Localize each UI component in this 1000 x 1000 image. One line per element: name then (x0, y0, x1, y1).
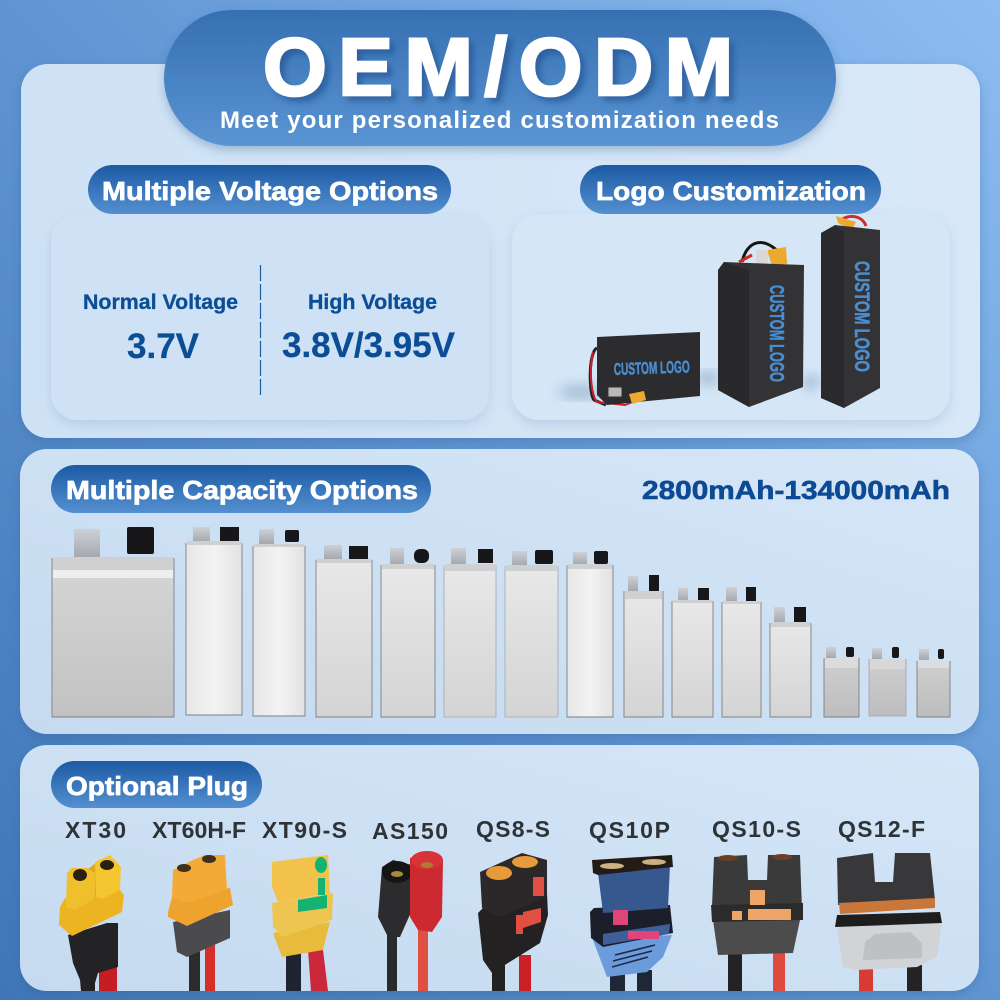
pouch cell 8 (567, 551, 613, 717)
label: AS150: AS150 (372, 818, 448, 844)
pouch cell 7 (505, 550, 558, 717)
logo text: CUSTOM LOGO (613, 357, 690, 379)
connector: XT30 (59, 855, 124, 991)
heading: capacity (51, 465, 431, 513)
label: XT90-S: XT90-S (262, 817, 347, 843)
pouch cell 10 (672, 588, 713, 717)
connector: XT90-S (272, 855, 333, 991)
pouch cell 9 (624, 575, 663, 717)
label: QS12-F: QS12-F (838, 816, 925, 842)
title: OEM/ODM (263, 22, 733, 113)
pouch cell 15 (917, 649, 950, 717)
connector: AS150 (378, 851, 443, 991)
connector: QS10-S (711, 854, 803, 991)
connector: QS10P (590, 855, 673, 991)
connector: QS8-S (478, 853, 548, 991)
heading: voltage: Multiple Voltage Options (102, 176, 438, 206)
high voltage value: 3.8V/3.95V (282, 326, 456, 365)
normal voltage label: Normal Voltage (83, 291, 238, 314)
floor shadows (558, 371, 821, 399)
normal voltage value: 3.7V (127, 327, 200, 366)
pouch cell 4 (316, 545, 372, 717)
voltage divider (260, 265, 262, 397)
pouch cell 5 (381, 548, 435, 717)
label: XT60H-F: XT60H-F (152, 817, 246, 843)
battery: tall pack (821, 216, 880, 408)
label: QS10P: QS10P (589, 817, 670, 843)
pouch cell 3 (253, 529, 305, 716)
connectors (59, 851, 942, 991)
label: XT30: XT30 (65, 817, 126, 843)
heading: plug: Optional Plug (66, 771, 248, 801)
panel: logo card (512, 214, 950, 420)
pouch cell 2 (186, 527, 242, 715)
connector: QS12-F (835, 853, 942, 991)
battery: medium pack (718, 242, 804, 407)
heading: capacity: Multiple Capacity Options (66, 475, 418, 505)
pouch cell 11 (722, 587, 761, 717)
panel: optional plug (20, 745, 979, 991)
heading: voltage (88, 165, 451, 214)
header banner (164, 10, 836, 146)
heading: logo (580, 165, 881, 214)
high voltage label: High Voltage (308, 291, 437, 314)
panel: capacity options (20, 449, 979, 734)
panel: customization options (21, 64, 980, 438)
label: QS10-S: QS10-S (712, 816, 801, 842)
logo text: CUSTOM LOGO (850, 261, 873, 372)
pouch cell 12 (770, 607, 811, 717)
heading: plug (51, 761, 262, 808)
pouch cell 1 (52, 527, 174, 717)
panel: voltage card (51, 214, 489, 420)
pouch cell 6 (444, 548, 496, 717)
pouch cell 13 (824, 647, 859, 717)
battery: flat pack (590, 332, 700, 405)
pouch cell 14 (869, 647, 906, 716)
capacity range: 2800mAh-134000mAh (642, 475, 950, 505)
label: QS8-S: QS8-S (476, 816, 550, 842)
connector: XT60H-F (168, 855, 233, 991)
heading: logo: Logo Customization (596, 176, 866, 206)
logo text: CUSTOM LOGO (765, 285, 787, 382)
subtitle: Meet your personalized customization needs (220, 107, 779, 134)
